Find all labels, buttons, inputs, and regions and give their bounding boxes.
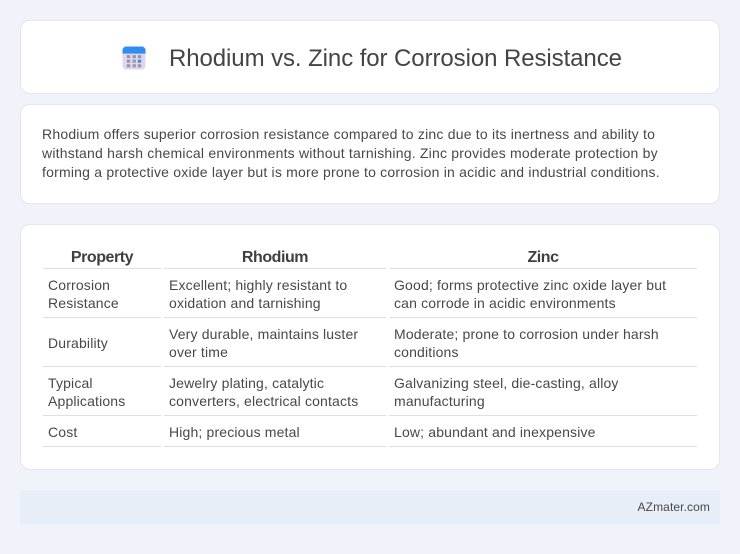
icon: calendar [122, 46, 146, 70]
row: Typical Applications: manufacturing [394, 393, 485, 409]
title: Rhodium vs. Zinc for Corrosion Resistance [169, 45, 622, 72]
row: Typical Applications: converters, electrical contacts [169, 393, 358, 409]
row: Durability: conditions [394, 344, 459, 360]
row: Corrosion Resistance: Corrosion [48, 277, 110, 293]
row: Typical Applications [48, 375, 619, 409]
row: Durability [48, 326, 659, 360]
row: Durability: Moderate; prone to corrosion under harsh [394, 326, 659, 342]
text block: summary line 2: withstand harsh chemical environments without tarnishing. Zinc provides moderate protection by [42, 145, 658, 161]
row: Cost [48, 424, 596, 440]
panel: summary [20, 104, 720, 204]
row: Durability: Durability [48, 335, 108, 351]
panel: comparison table [20, 224, 720, 470]
heading: Zinc: Zinc [527, 249, 559, 266]
row: Typical Applications: Jewelry plating, catalytic [169, 375, 324, 391]
row: Typical Applications: Galvanizing steel, die-casting, alloy [394, 375, 619, 391]
row: Corrosion Resistance: oxidation and tarnishing [169, 295, 321, 311]
row: Corrosion Resistance: can corrode in acidic environments [394, 295, 616, 311]
row: Cost: Cost [48, 424, 77, 440]
row: Durability: over time [169, 344, 228, 360]
row: Corrosion Resistance [48, 277, 666, 311]
text block: summary line 1: Rhodium offers superior corrosion resistance compared to zinc due to its inertness and ability to [42, 126, 655, 142]
heading: Rhodium: Rhodium [242, 249, 308, 266]
heading: Property: Property [71, 249, 133, 266]
row: Cost: High; precious metal [169, 424, 300, 440]
panel: title card [20, 20, 720, 94]
text block: summary line 3: forming a protective oxide layer but is more prone to corrosion in acidic and industrial conditions. [42, 164, 660, 180]
row: Corrosion Resistance: Excellent; highly resistant to [169, 277, 347, 293]
row: Typical Applications: Typical [48, 375, 93, 391]
footer credit: AZmater.com [638, 500, 710, 514]
row: Typical Applications: Applications [48, 393, 125, 409]
footer [20, 490, 720, 524]
row: Durability: Very durable, maintains luster [169, 326, 358, 342]
row: Cost: Low; abundant and inexpensive [394, 424, 596, 440]
row: Corrosion Resistance: Resistance [48, 295, 119, 311]
row: Corrosion Resistance: Good; forms protective zinc oxide layer but [394, 277, 666, 293]
